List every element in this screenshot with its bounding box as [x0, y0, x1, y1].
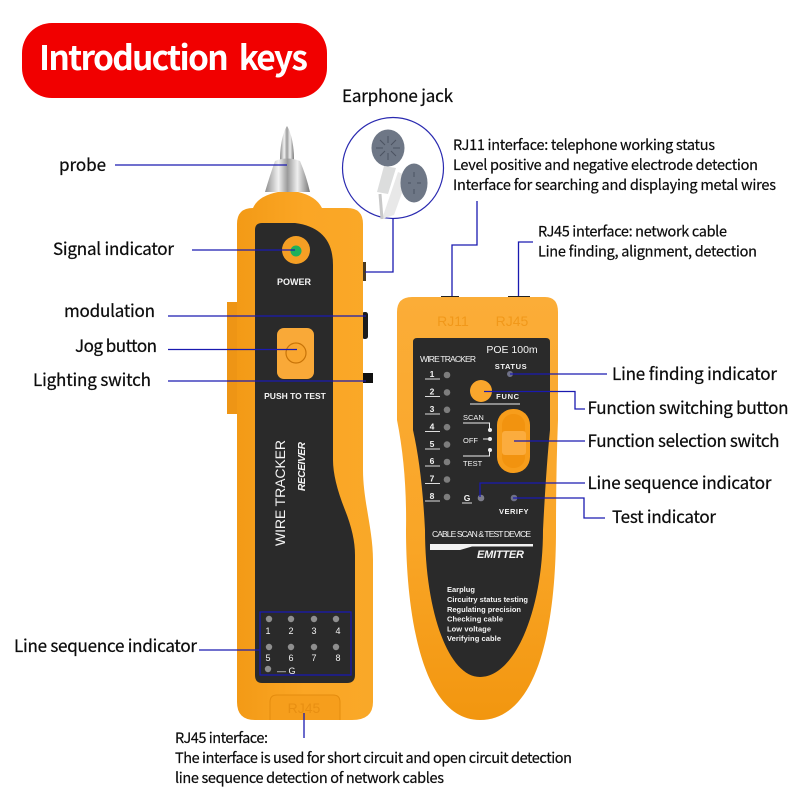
side clip: [227, 302, 238, 414]
RJ11 description: RJ11 interface: telephone working status: [453, 134, 715, 155]
emitter device: [397, 296, 558, 720]
modulation wheel: [362, 312, 368, 339]
RJ45 receiver description: [175, 727, 572, 788]
LED grid: 3: [311, 626, 317, 636]
signal LED: [282, 236, 310, 264]
ground indicator: G: [464, 493, 471, 503]
function list: Checking cable: [447, 614, 503, 624]
title badge: Introduction keys: [39, 31, 308, 80]
label: test indicator: Test indicator: [612, 503, 716, 528]
side jack: [362, 262, 366, 281]
verify indicator: VERIFY: [499, 507, 529, 516]
embossed port labels: RJ11: [437, 313, 469, 329]
label: function switching button: Function switching button: [588, 394, 788, 419]
channel indicators: 7: [430, 474, 435, 484]
label: modulation: modulation: [64, 297, 155, 322]
channel indicators: 1: [430, 369, 435, 379]
channel indicators: 4: [430, 422, 435, 432]
top ports: [441, 296, 530, 298]
function list: Low voltage: [447, 624, 491, 634]
POE label: POE 100m: [486, 344, 538, 356]
emitter faceplate: [413, 338, 550, 677]
jog button: [277, 328, 314, 379]
power label: POWER: [277, 277, 311, 287]
label: earphone jack: Earphone jack: [342, 82, 454, 107]
RJ11 description: [453, 134, 776, 195]
RJ45 emitter description: RJ45 interface: network cable: [538, 220, 727, 242]
LED grid: 2: [288, 626, 294, 636]
verify indicator: [499, 495, 529, 516]
LED grid: 1: [265, 626, 271, 636]
LED grid: 8: [335, 653, 341, 663]
scan off test selector labels: OFF: [463, 436, 478, 445]
status indicator: STATUS: [495, 362, 527, 371]
emitter body: [397, 297, 558, 720]
scan off test selector labels: [463, 413, 492, 468]
func label: [470, 392, 520, 404]
selection switch: [497, 409, 530, 473]
func label: FUNC: [496, 392, 520, 401]
RJ45 receiver description: RJ45 interface:: [175, 727, 268, 748]
label: line sequence indicator left: Line sequence indicator: [14, 632, 197, 657]
scan off test selector labels: SCAN: [463, 413, 484, 422]
label: probe: probe: [59, 151, 106, 176]
RJ45 receiver description: line sequence detection of network cables: [175, 767, 444, 788]
push to test label: PUSH TO TEST: [264, 391, 327, 401]
embossed port labels: [437, 313, 529, 329]
LED grid: 5: [265, 653, 271, 663]
function list: [447, 585, 528, 643]
label: line finding indicator: Line finding indicator: [612, 360, 777, 385]
leader lines: [115, 165, 607, 738]
RJ11 description: Interface for searching and displaying metal wires: [453, 174, 776, 195]
channel indicators: 8: [430, 491, 435, 501]
label: lighting switch: Lighting switch: [33, 366, 151, 391]
status indicator: [495, 362, 527, 377]
receiver label: RECEIVER: [297, 441, 308, 491]
label: jog button: Jog button: [75, 332, 157, 357]
function list: Circuitry status testing: [447, 595, 528, 604]
channel indicators: 3: [430, 404, 435, 414]
lighting switch knob: [363, 373, 373, 383]
ground indicator: [462, 493, 484, 503]
RJ45 receiver description: The interface is used for short circuit and open circuit detection: [175, 747, 572, 768]
swoosh: [430, 544, 533, 550]
channel indicators: 2: [430, 386, 435, 396]
channel indicators: [425, 369, 450, 501]
RJ45 emitter description: [538, 220, 757, 262]
RJ11 description: Level positive and negative electrode detection: [453, 154, 758, 175]
receiver device: [227, 126, 373, 720]
emitter label: EMITTER: [477, 549, 524, 561]
embossed port labels: RJ45: [496, 313, 529, 329]
LED grid: 6: [288, 653, 294, 663]
channel indicators: 5: [430, 439, 435, 449]
device caption: CABLE SCAN & TEST DEVICE: [432, 529, 531, 539]
label: signal indicator: Signal indicator: [53, 235, 174, 260]
RJ45 emitter description: Line finding, alignment, detection: [538, 240, 757, 262]
function list: Earplug: [447, 585, 475, 594]
earphone inset: [342, 118, 444, 219]
LED grid: 7: [311, 653, 317, 663]
LED grid: [265, 616, 341, 676]
title badge: [22, 23, 327, 98]
function list: Verifying cable: [447, 634, 501, 643]
channel indicators: 6: [430, 456, 435, 466]
probe: [265, 126, 310, 192]
LED grid: — G: [277, 666, 296, 676]
function button: [470, 380, 492, 402]
RJ45 port: RJ45: [288, 700, 321, 716]
wire tracker heading: WIRE TRACKER: [420, 354, 476, 364]
LED grid: 4: [335, 626, 341, 636]
label: line sequence indicator right: Line sequence indicator: [588, 469, 772, 494]
receiver faceplate: [255, 223, 355, 683]
wire tracker label: WIRE TRACKER: [272, 440, 288, 546]
scan off test selector labels: TEST: [463, 459, 483, 468]
label: function selection switch: Function selection switch: [588, 427, 780, 452]
function list: Regulating precision: [447, 605, 521, 614]
RJ45 port: [270, 695, 340, 720]
receiver body: [237, 192, 373, 720]
